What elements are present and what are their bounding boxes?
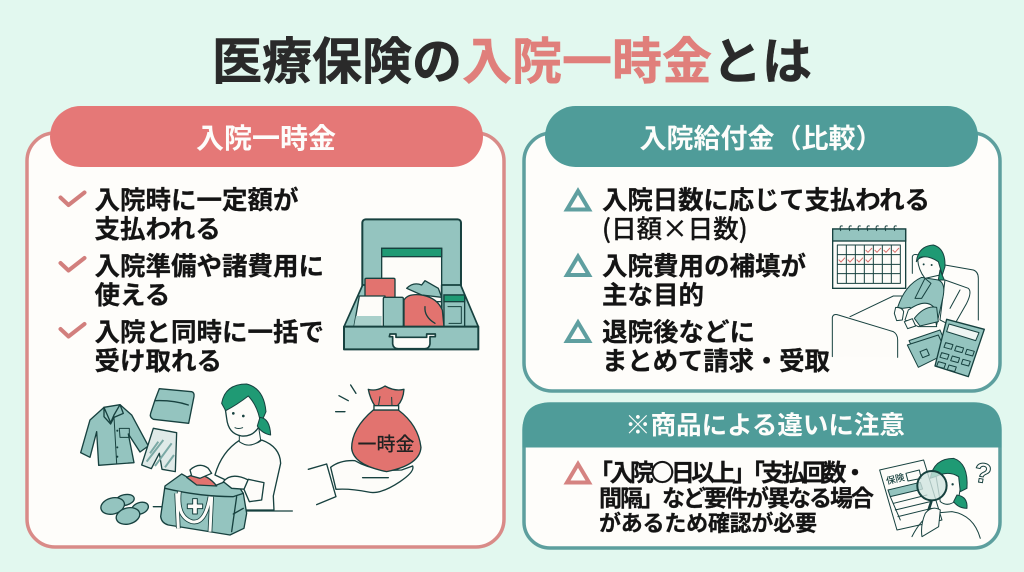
list item: 一括 [60, 319, 324, 376]
icon: calculator [935, 319, 984, 377]
icon: hospital bag [161, 465, 264, 535]
list item: 一定額 [60, 186, 299, 244]
panel frame: note [524, 404, 1000, 548]
note text: 間隔」など要件が異なる場合 [599, 485, 874, 511]
list item: 日数 [567, 187, 930, 246]
list item: 一定額: 入院時に一定額が [94, 186, 299, 215]
figure: patient [850, 245, 978, 329]
figure: woman packing [153, 384, 292, 511]
panel: 注意 [524, 404, 1000, 548]
icon: bed foot [832, 315, 898, 357]
list item: 一定額: 支払われる [94, 216, 221, 244]
note icon: triangle [567, 464, 589, 482]
panel: 入院一時金 [27, 106, 504, 547]
icon: pajama top [81, 405, 148, 465]
illustration: checking a document with magnifier [880, 456, 994, 538]
icon: open suitcase [344, 219, 478, 349]
list item: 請求 [567, 319, 830, 376]
list item: 請求: まとめて請求・受取 [602, 348, 830, 376]
list item: 諸費用: 入院準備や諸費用に [94, 253, 324, 281]
list item: 補填 [567, 252, 806, 310]
note text: 「入院〇日以上」「支払回数・ [589, 453, 867, 488]
panel frame: left [27, 133, 504, 547]
list item: 一括: 入院と同時に一括で [94, 319, 324, 347]
icon: calendar [833, 226, 906, 288]
title: 医療保険の入院一時金とは [212, 34, 812, 90]
list item: 日数: 入院日数に応じて支払われる [602, 187, 930, 215]
icon: slippers [99, 493, 150, 527]
list item: 日数: (日額×日数) [602, 209, 748, 246]
panel: 入院給付金（比較） [524, 106, 1000, 391]
panel header: 注意 [524, 404, 1000, 446]
icon: folded cloth [150, 389, 194, 423]
icon: hand holding money bag [308, 385, 421, 505]
icon: shorts [142, 428, 177, 472]
list item: 補填: 入院費用の補填が [602, 252, 806, 281]
note text [589, 453, 874, 536]
list item: 請求: 退院後などに [602, 319, 755, 347]
panel header: 注意: ※商品による違いに注意 [625, 412, 905, 440]
list item: 諸費用 [60, 253, 324, 310]
panel header: 入院一時金 [50, 106, 483, 167]
note text: があるため確認が必要 [599, 511, 817, 536]
panel header: 入院給付金: 入院給付金（比較） [640, 124, 882, 154]
list item: 補填: 主な目的 [602, 282, 704, 310]
illustration: packing for hospital [81, 384, 421, 535]
icon: banknotes [907, 330, 948, 367]
panel header: 入院給付金 [545, 106, 978, 167]
list item: 一括: 受け取れる [94, 348, 222, 376]
illustration: patient in bed with calendar [832, 226, 984, 377]
panel header: 入院一時金: 入院一時金 [196, 123, 336, 154]
icon: hand holding money bag: 一時金 [357, 434, 414, 456]
panel frame: right [524, 133, 1000, 391]
list item: 諸費用: 使える [94, 282, 170, 310]
figure: woman with magnifier: ? [972, 456, 994, 490]
icon: insurance document: 保険 [885, 471, 906, 486]
